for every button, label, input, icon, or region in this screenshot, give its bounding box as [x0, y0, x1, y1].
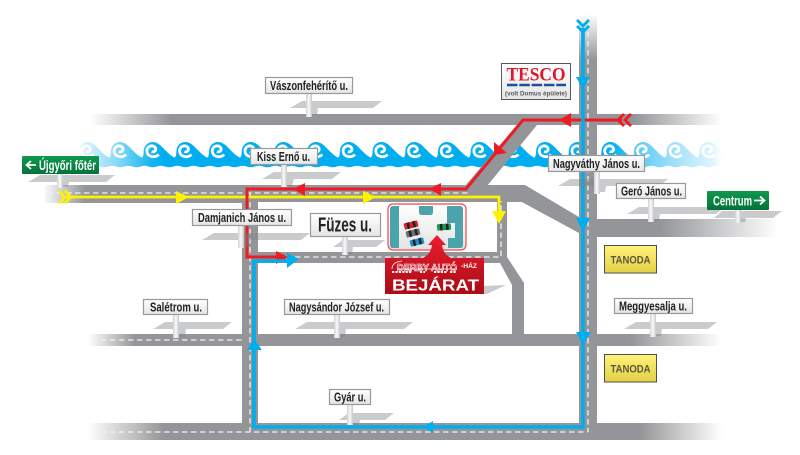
sign: Füzes u.: Füzes u. — [318, 214, 372, 236]
sign: Kiss Ernő u. — [250, 148, 341, 187]
car: blue — [409, 237, 425, 247]
sign: Tesco: TESCO — [506, 64, 566, 86]
sign: Újgyőri főtér — [22, 156, 115, 188]
red route — [247, 113, 631, 264]
sign: Geró János u. — [616, 184, 725, 222]
sign: Tanoda upper: TANODA — [610, 254, 651, 266]
sign: Salétrom u.: Salétrom u. — [150, 300, 202, 314]
sign: Meggyesalja u.: Meggyesalja u. — [619, 298, 687, 314]
sign: Centrum: Centrum — [713, 192, 752, 208]
entrance sign: Bejárat: -HÁZ — [461, 261, 477, 270]
sign: Gyár u. — [330, 390, 394, 425]
car: green — [437, 223, 451, 231]
sign: Vászonfehérítő u.: Vászonfehérítő u. — [270, 78, 348, 93]
parking lot plan — [388, 204, 466, 250]
entrance sign: Bejárat: BEJÁRAT — [392, 276, 479, 294]
sign: Tesco: (volt Domus épülete) — [505, 90, 567, 98]
sign: Damjanich János u. — [192, 210, 310, 248]
entrance sign: Bejárat: DERBY AUTÓ — [397, 261, 457, 274]
sign: Nagysándor József u.: Nagysándor József u. — [289, 300, 384, 314]
yellow route — [59, 190, 506, 224]
sign: Geró János u.: Geró János u. — [621, 184, 682, 198]
sign: Tanoda upper — [604, 246, 656, 273]
sign: Nagyváthy János u. — [548, 156, 668, 194]
sign: Kiss Ernő u.: Kiss Ernő u. — [257, 149, 310, 164]
sign: Damjanich János u.: Damjanich János u. — [198, 210, 286, 225]
sign: Gyár u.: Gyár u. — [334, 390, 366, 404]
blue route — [247, 20, 591, 433]
sign: Tanoda lower — [604, 354, 656, 382]
sign: Nagyváthy János u.: Nagyváthy János u. — [553, 156, 640, 171]
sign: Füzes u. — [310, 214, 385, 255]
sign: Újgyőri főtér: Újgyőri főtér — [39, 156, 96, 173]
car: red — [403, 220, 419, 230]
sign: Centrum — [707, 191, 782, 223]
road centre dashes — [48, 32, 588, 432]
car: grey — [405, 228, 421, 238]
sign: Meggyesalja u. — [614, 298, 717, 337]
entrance sign: Bejárat — [385, 235, 506, 294]
sign: Salétrom u. — [144, 300, 232, 338]
sign: Tesco — [502, 64, 570, 100]
sign: Vászonfehérítő u. — [266, 78, 382, 117]
sign: Tanoda lower: TANODA — [610, 364, 651, 376]
sign: Nagysándor József u. — [284, 300, 413, 338]
river waves — [80, 141, 722, 169]
